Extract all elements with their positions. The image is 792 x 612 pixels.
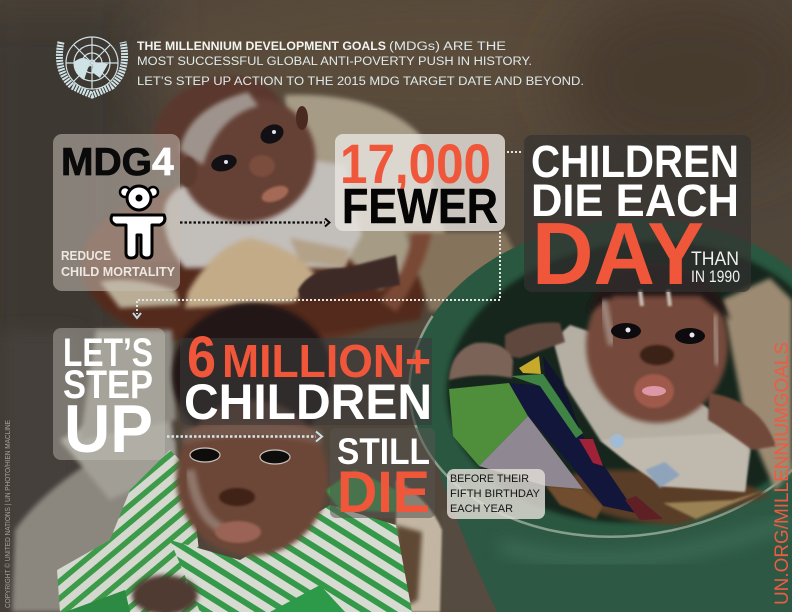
photo: baby in basket (top) <box>80 59 520 346</box>
panel: still die: STILL <box>337 431 430 472</box>
panel: 6 million+ children: MILLION+ <box>222 335 431 387</box>
panel: let's step up: LET’S <box>63 331 153 375</box>
logo: United Nations emblem <box>59 37 125 95</box>
shirt <box>164 160 362 268</box>
hand <box>298 255 400 300</box>
icon: child <box>111 186 165 258</box>
photo: white bucket and grey cloth (bottom left) <box>12 330 442 612</box>
panel: children die each day: DIE EACH <box>531 175 739 226</box>
header text <box>137 39 584 88</box>
panel: 17,000 fewer: FEWER <box>342 180 498 234</box>
head <box>172 303 332 447</box>
panel: let's step up <box>53 328 165 467</box>
panel: let's step up: STEP <box>63 363 153 407</box>
bucket body <box>412 330 792 612</box>
header text: LET’S STEP UP ACTION TO THE 2015 MDG TARGET DATE AND BEYOND. <box>137 74 584 88</box>
blanket <box>100 238 350 308</box>
label: reduce child mortality <box>61 248 175 279</box>
head <box>140 59 332 240</box>
baby body <box>553 325 752 490</box>
panel: 6 million+ children: 6 <box>187 325 216 390</box>
panel: before their fifth birthday: BEFORE THEIR <box>450 473 529 485</box>
tan cloth behind baby <box>285 95 520 312</box>
knitted blanket <box>449 356 663 520</box>
striped shirt <box>57 450 412 612</box>
heading: MDG4: 4 <box>152 141 174 184</box>
arrow: let's step up to still die <box>167 432 322 442</box>
panel: children die each day <box>524 135 751 303</box>
basket <box>80 178 442 346</box>
panel: still die: DIE <box>337 460 430 525</box>
panel: 17,000 fewer <box>335 132 505 234</box>
copyright credit: COPYRIGHT © UNITED NATIONS | UN PHOTO/HIEN MACLINE <box>3 420 12 608</box>
panel: 6 million+ children <box>180 325 432 430</box>
panel: let's step up: UP <box>64 391 153 467</box>
panel: children die each day: CHILDREN <box>531 136 739 187</box>
header text: THE MILLENNIUM DEVELOPMENT GOALS <box>137 39 386 53</box>
panel: children die each day: DAY <box>532 204 704 303</box>
arrow: MDG4 to 17,000 <box>180 218 330 226</box>
head <box>586 264 730 423</box>
arrowhead: down <box>133 313 141 318</box>
panel: before their fifth birthday <box>447 469 545 519</box>
panel: MDG4 <box>53 134 180 291</box>
connector: 17,000 to let's step up <box>137 152 523 314</box>
panel: 6 million+ children: CHILDREN <box>184 374 432 430</box>
panel: children die each day: IN 1990 <box>691 267 740 286</box>
label: reduce child mortality: CHILD MORTALITY <box>61 264 175 279</box>
photo: baby in striped shirt (bottom) <box>57 303 412 612</box>
panel: still die <box>330 428 435 525</box>
panel: 17,000 fewer: 17,000 <box>340 132 491 195</box>
header text: (MDGs) ARE THE <box>389 39 506 53</box>
panel: before their fifth birthday: FIFTH BIRTHDAY <box>450 488 541 500</box>
panel: before their fifth birthday: EACH YEAR <box>450 503 513 515</box>
panel: children die each day: THAN <box>691 249 739 270</box>
header text: MOST SUCCESSFUL GLOBAL ANTI-POVERTY PUSH IN HISTORY. <box>137 54 532 68</box>
photo: green bucket with baby (right) <box>394 198 792 612</box>
label: reduce child mortality: REDUCE <box>61 248 111 263</box>
arms <box>708 393 776 450</box>
cloth at right <box>722 278 792 490</box>
heading: MDG4: MDG <box>61 141 152 184</box>
bottom contents <box>540 470 770 525</box>
